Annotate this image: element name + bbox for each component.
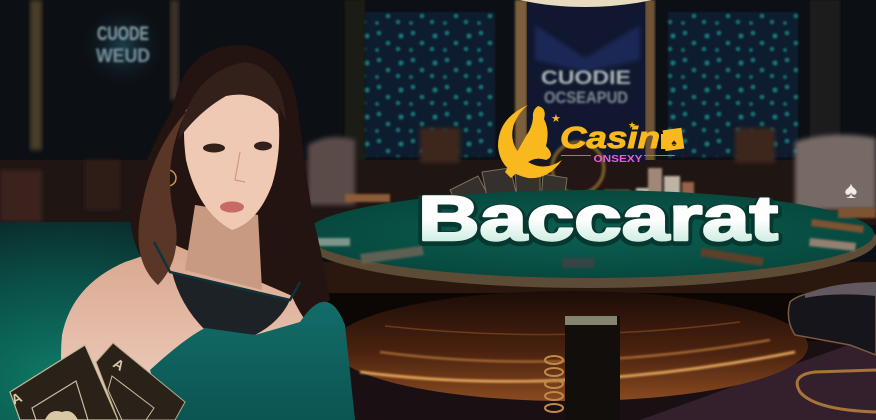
dress xyxy=(150,302,355,420)
lips xyxy=(220,202,244,212)
title: Baccarat xyxy=(418,186,778,256)
table items xyxy=(304,194,876,268)
icon: stars: ★ xyxy=(551,113,561,125)
neon wall sign left: WEUD xyxy=(96,46,150,67)
neon wall sign centre xyxy=(527,2,645,162)
neon wall sign centre: CUODIE xyxy=(541,68,631,89)
title: Baccarat xyxy=(418,184,778,254)
icon: crescent moon xyxy=(498,105,562,178)
front card: A xyxy=(9,389,24,408)
icon: stars xyxy=(551,113,636,130)
icon: card box xyxy=(661,128,684,151)
back card: A xyxy=(110,355,127,374)
neon wall sign left: CUODE xyxy=(97,24,149,45)
face xyxy=(184,88,279,230)
front card xyxy=(9,345,118,420)
woman figure illustration xyxy=(61,45,355,420)
neck xyxy=(185,205,262,290)
icon: card box: ♠ xyxy=(671,138,677,149)
logo: Casino Onsexy xyxy=(498,105,684,178)
ceiling lamp xyxy=(520,0,652,7)
chairs behind table xyxy=(308,128,876,210)
earring xyxy=(160,170,176,186)
foreground chip stack xyxy=(545,316,620,420)
shoulders and arm xyxy=(61,245,345,420)
nose xyxy=(235,152,245,182)
eyes xyxy=(203,144,225,152)
back card xyxy=(96,343,185,420)
hair fringe xyxy=(178,62,286,140)
roulette wheel and chips xyxy=(552,142,694,204)
playing cards on table xyxy=(450,168,567,232)
icon: stars: ★ xyxy=(628,120,636,130)
front hair strands xyxy=(138,112,186,285)
round baccarat table xyxy=(300,190,876,401)
teal glitter wall panels xyxy=(365,12,798,157)
neck strap xyxy=(154,242,300,300)
tagline: ONSEXY xyxy=(594,153,642,165)
hair back xyxy=(130,45,321,310)
foreground dark chair xyxy=(788,282,876,412)
ace cards in foreground xyxy=(9,343,185,420)
wordmark: Casin xyxy=(560,120,660,155)
neon wall sign centre: OCSEAPUD xyxy=(544,88,628,107)
tagline xyxy=(561,153,675,165)
lace collar xyxy=(172,272,290,335)
neon wall sign left xyxy=(79,2,167,90)
spade card icon: ♠ xyxy=(845,177,858,204)
icon: seated figure xyxy=(505,106,551,178)
